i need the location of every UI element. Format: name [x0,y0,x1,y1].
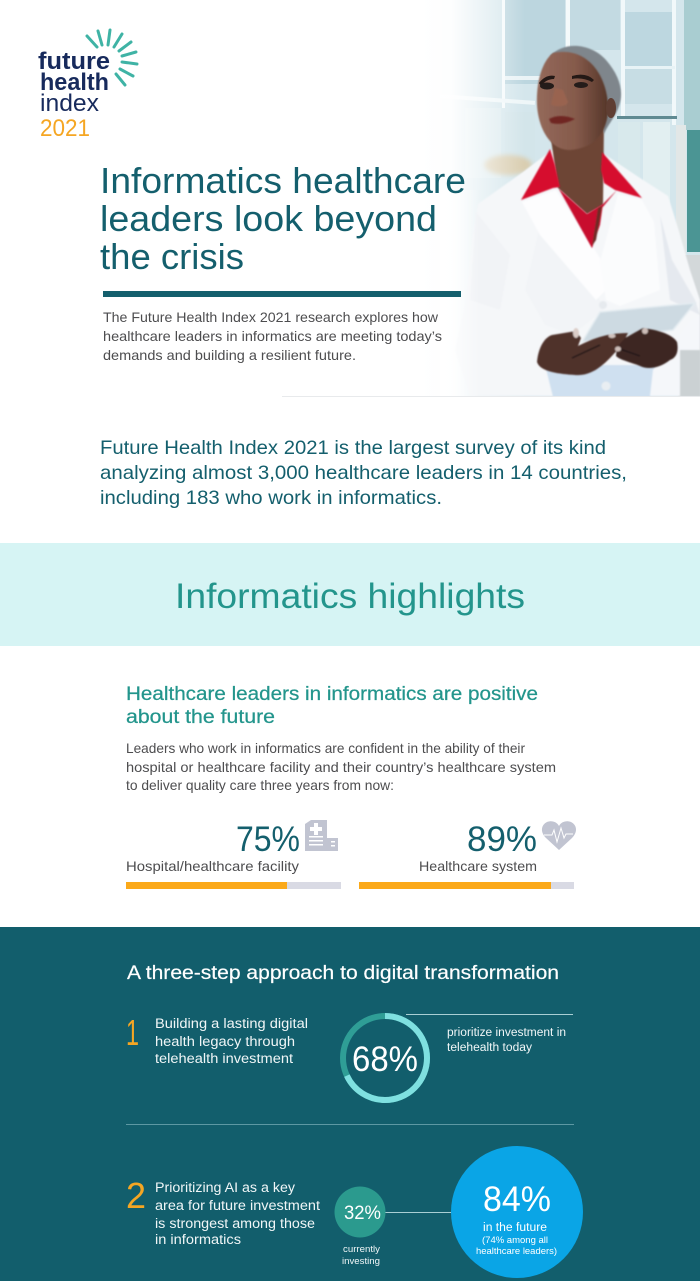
hero description: The Future Health Index 2021 research explores how [103,309,439,325]
highlights description: Leaders who work in informatics are confident in the ability of their [126,740,525,756]
step 2 text: area for future investment [155,1198,320,1213]
step 1 text [155,1016,308,1066]
callout line [406,1014,573,1015]
step 1 number: 1 [126,1012,139,1053]
logo wordmark: index [40,90,99,117]
doctor: red shirt and collar [521,149,642,248]
logo rays [87,30,137,85]
donut chart 68% [343,1016,427,1100]
logo wordmark: 2021 [40,115,90,142]
hero description [103,309,442,363]
donut caption [447,1027,566,1054]
title: the crisis [100,236,244,277]
progress bar 75% [126,882,341,889]
step 2 number: 2 [126,1175,146,1216]
step 1 text: health legacy through [155,1034,295,1049]
coat left fade [440,190,480,396]
donut chart 68%: 68% [352,1040,418,1079]
icon: heart with pulse [542,821,576,850]
bubble caption: currently [343,1244,380,1255]
doctor: hands [537,328,678,375]
step 1 text: telehealth investment [155,1051,293,1066]
intro statement: including 183 who work in informatics. [100,487,442,509]
logo: future health index 2021 [38,30,137,142]
bubble 32%: 32% [344,1202,381,1224]
step 1 text: Building a lasting digital [155,1016,308,1031]
hero description: healthcare leaders in informatics are meeting today’s [103,328,442,344]
bubble 84%: 84% [483,1180,551,1219]
doctor: head and hair [537,46,621,150]
title [100,160,466,277]
title: leaders look beyond [100,198,437,239]
stat: healthcare system 89%: Healthcare system [419,858,537,874]
bubble 84%: in the future [483,1222,547,1234]
connector line [380,1212,455,1213]
title: Informatics healthcare [100,160,466,201]
section banner: informatics highlights: Informatics highlights [175,577,525,616]
intro statement: Future Health Index 2021 is the largest survey of its kind [100,437,606,459]
stat: hospital 75% [126,820,341,889]
stat: healthcare system 89%: 89% [467,820,537,859]
step 1 [126,1012,573,1100]
stat: hospital 75%: 75% [236,820,300,859]
title rule [103,291,461,297]
photo background: glass building [462,0,700,396]
step 2 text: is strongest among those [155,1216,315,1231]
bubble 84%: (74% among all [482,1235,548,1246]
highlights description: hospital or healthcare facility and their country’s healthcare system [126,759,556,775]
hero photo: doctor with tablet [462,0,700,396]
icon: hospital [305,820,338,851]
step 2 text: Prioritizing AI as a key [155,1180,295,1195]
donut caption: prioritize investment in [447,1027,566,1039]
step 2 [126,1146,583,1278]
panel: three-step approach [0,927,700,1281]
doctor: neck [550,122,604,214]
bubble caption: investing [342,1256,380,1267]
donut caption: telehealth today [447,1042,532,1054]
panel heading: A three-step approach to digital transformation [127,962,559,984]
bubble caption [342,1244,380,1267]
step 2 text: in informatics [155,1232,241,1247]
subheading: positive about the future: Healthcare leaders in informatics are positive [126,683,538,705]
highlights description [126,740,556,793]
subheading: positive about the future: about the future [126,706,275,728]
logo wordmark: health [40,69,109,96]
doctor: coat [480,150,700,396]
bubble 32% [334,1186,386,1238]
highlights description: to deliver quality care three years from now: [126,777,394,793]
bubble 84%: healthcare leaders) [476,1246,557,1257]
doctor: tablet [582,303,695,342]
bubble 84% [451,1146,583,1278]
hero description: demands and building a resilient future. [103,347,356,363]
section banner: informatics highlights [0,543,700,646]
step 2 text [155,1180,320,1247]
stat: hospital 75%: Hospital/healthcare facility [126,858,299,874]
intro statement: analyzing almost 3,000 healthcare leaders in 14 countries, [100,462,627,484]
left white fade [420,0,525,396]
photo bottom edge [282,396,700,397]
logo wordmark: future [38,48,110,75]
intro statement [100,437,627,509]
progress bar 89% [359,882,574,889]
stat: healthcare system 89% [359,820,576,889]
subheading: positive about the future [126,683,538,728]
logo wordmark [38,48,110,142]
